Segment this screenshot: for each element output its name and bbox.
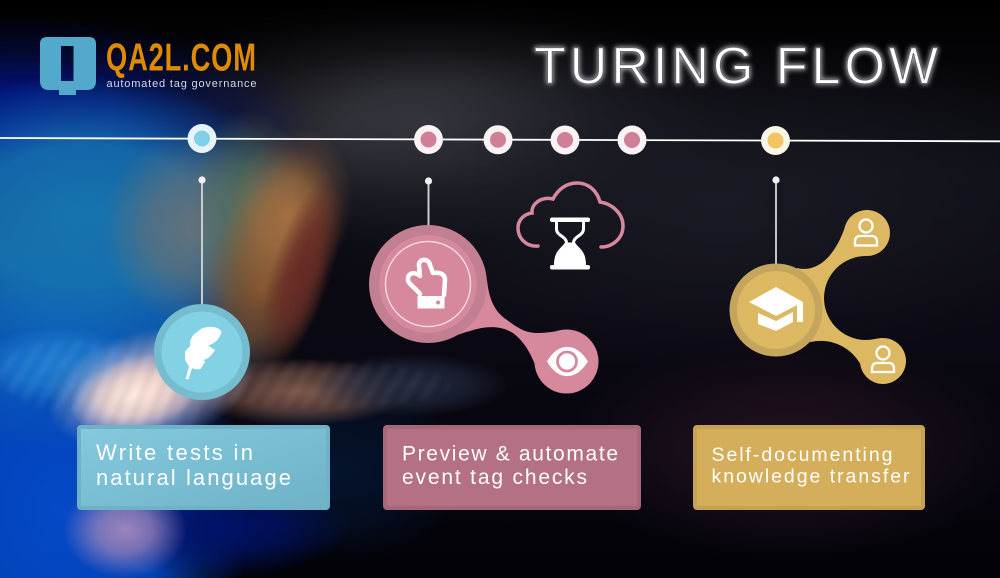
text box: write tests: Write tests in: [96, 440, 253, 465]
icon: lower person badge: [860, 338, 906, 384]
logo: [40, 37, 257, 95]
connector pin: [198, 176, 206, 306]
icon: cloud with hourglass: [518, 183, 623, 270]
title: TURING FLOW: [534, 38, 938, 96]
timeline node: gold: [761, 126, 790, 155]
timeline node: pink 4: [618, 126, 646, 154]
icon: feather badge: [154, 304, 250, 400]
icon: eye badge: [534, 330, 598, 394]
timeline node: blue: [188, 124, 216, 153]
text box: knowledge transfer: [695, 427, 923, 508]
icon: logo tag: [40, 37, 96, 95]
timeline node: pink 1: [414, 125, 443, 154]
logo name: QA2L.COM: [106, 37, 257, 80]
text box: preview and automate: Preview & automate: [402, 442, 618, 466]
icon: graduation cap badge: [730, 264, 822, 356]
panel: write tests: [79, 176, 328, 508]
timeline node: pink 2: [484, 125, 512, 154]
panel: preview and automate: [369, 177, 639, 508]
icon: upper person badge: [844, 210, 890, 256]
timeline node: pink 3: [550, 126, 580, 154]
panel: knowledge transfer: [695, 176, 923, 508]
text box: write tests: natural language: [96, 465, 291, 490]
text box: knowledge transfer: Self-documenting: [712, 444, 892, 466]
logo tagline: automated tag governance: [106, 78, 256, 90]
blob: gold connectors: [797, 227, 883, 367]
timeline: [0, 124, 1000, 155]
text box: preview and automate: event tag checks: [402, 466, 587, 489]
blob: pink connector: [450, 280, 566, 370]
text box: write tests: [79, 427, 328, 508]
background: rainbow streak and light flare: [0, 111, 450, 470]
connector pin: [772, 176, 780, 264]
icon: hand badge: [369, 225, 487, 343]
connector pin: [425, 177, 432, 226]
title: TURING FLOW: [534, 38, 938, 96]
text box: knowledge transfer: knowledge transfer: [712, 466, 910, 488]
text box: preview and automate: [385, 427, 639, 508]
